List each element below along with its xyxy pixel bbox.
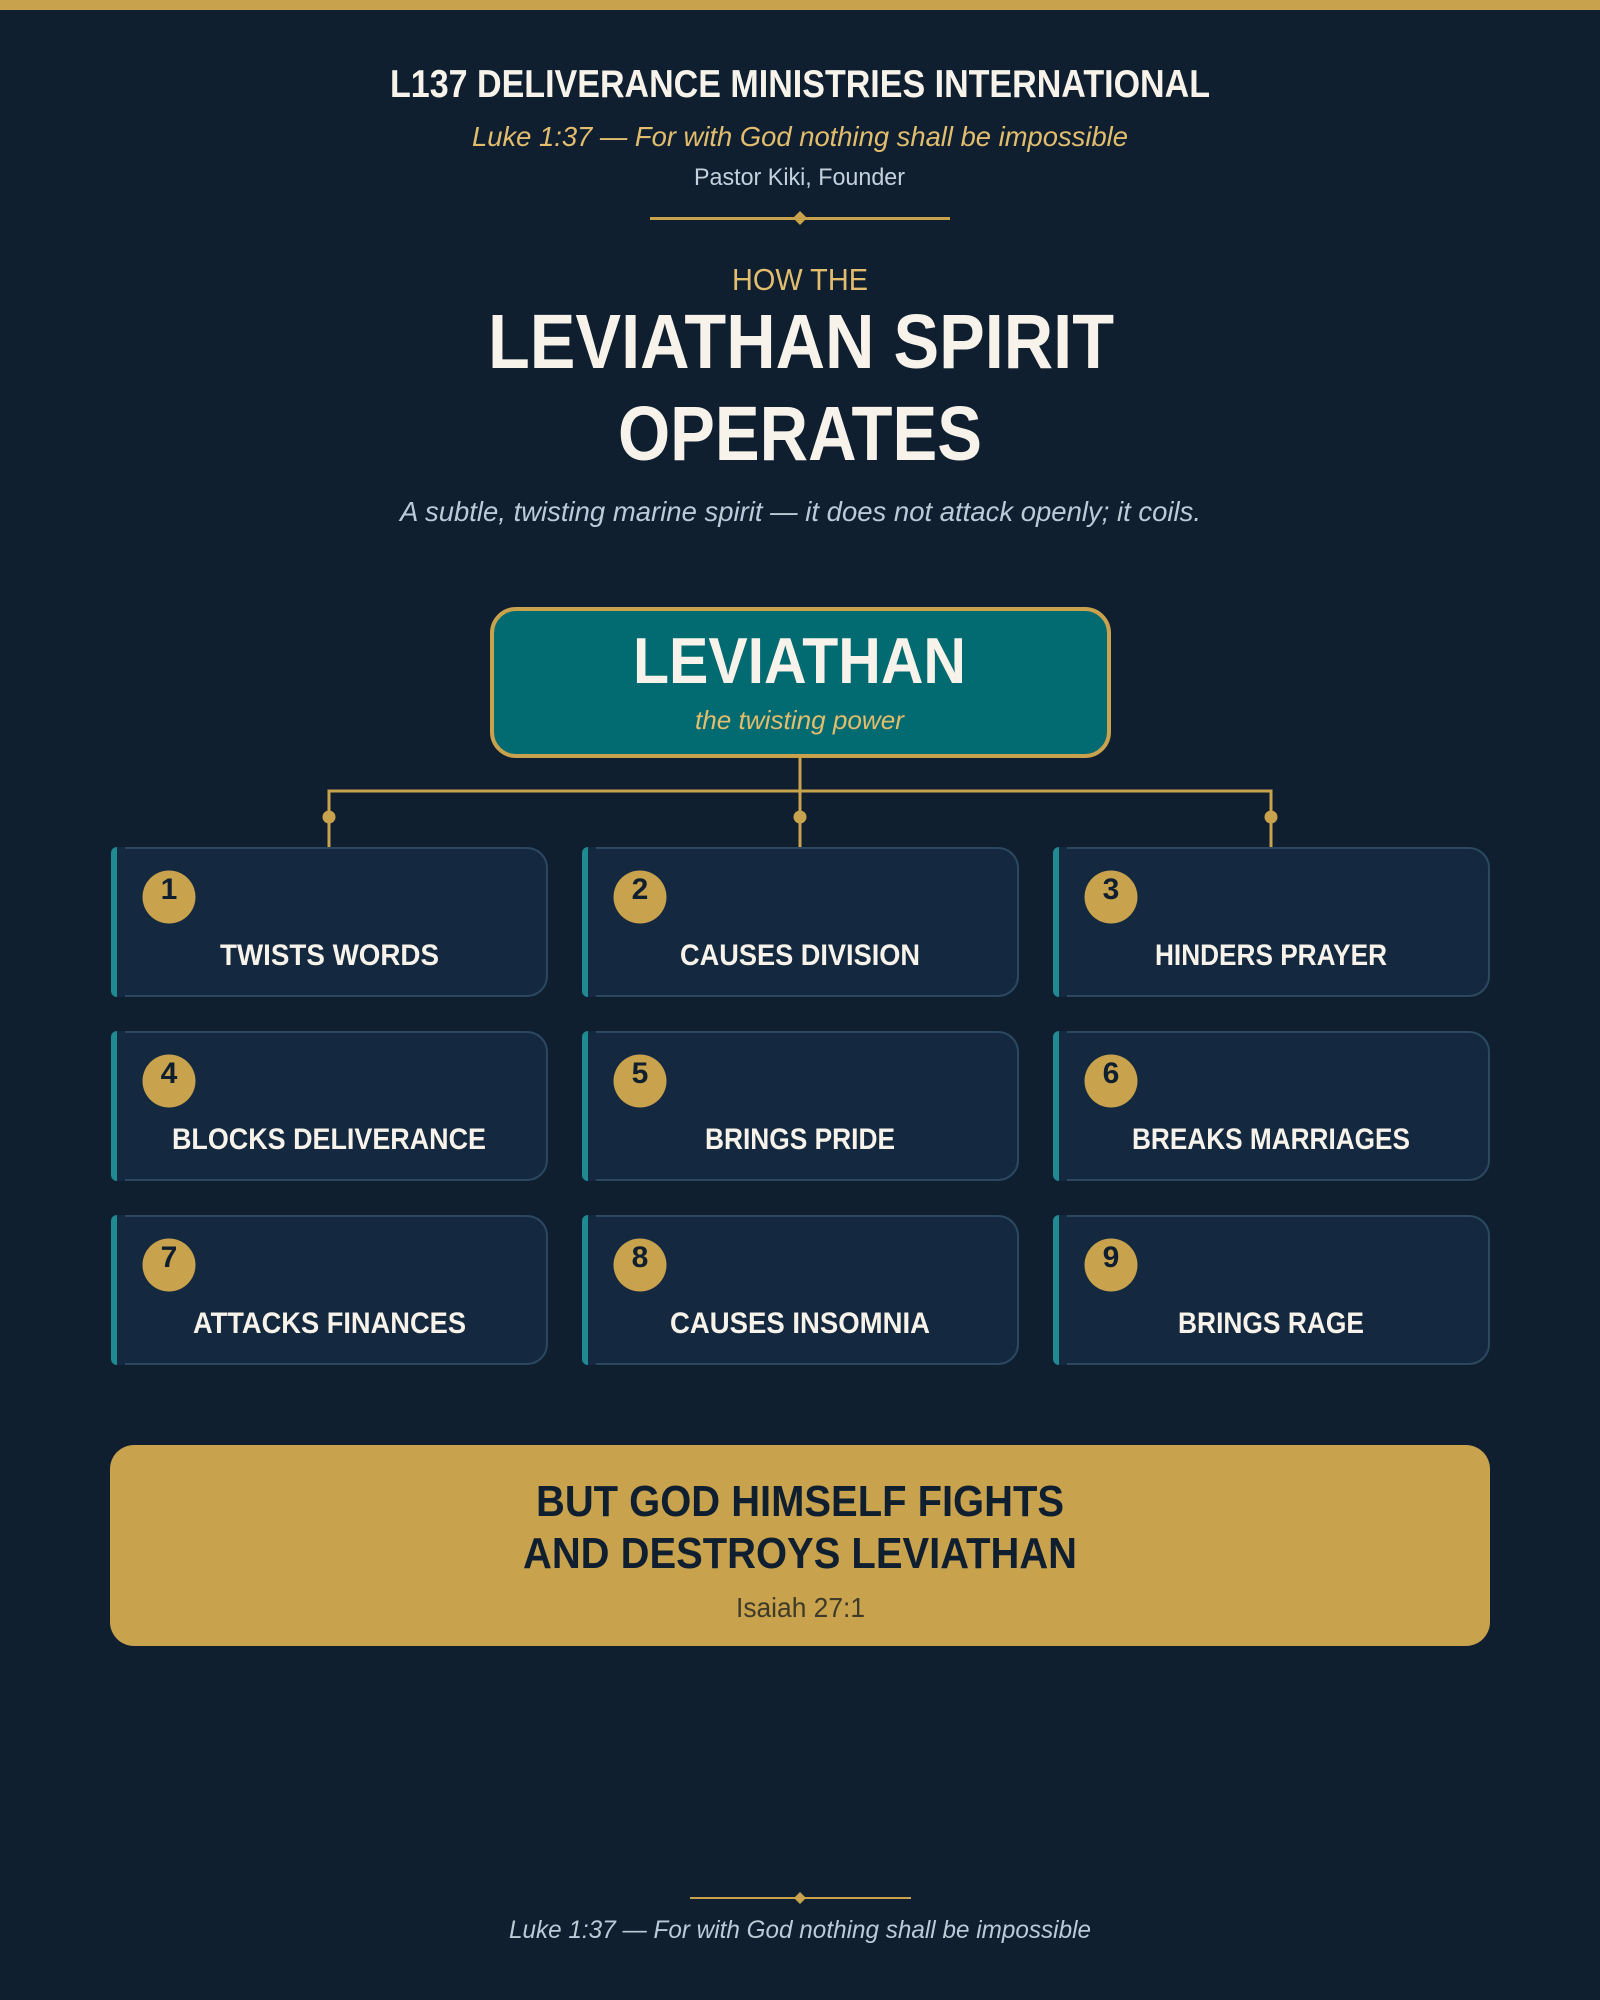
card 9: BRINGS RAGE	[1178, 1307, 1364, 1340]
card 1: TWISTS WORDS	[220, 939, 439, 972]
header divider with diamond	[650, 211, 950, 225]
callout heading line 2: AND DESTROYS LEVIATHAN	[523, 1529, 1077, 1578]
card 1: 1	[161, 873, 177, 906]
callout reference: Isaiah 27:1	[736, 1592, 865, 1623]
header: ministry block	[390, 63, 1210, 191]
card 9: 9	[1103, 1241, 1119, 1274]
title block	[398, 262, 1201, 527]
card 4: BLOCKS DELIVERANCE	[172, 1123, 486, 1156]
connector tree	[322, 757, 1278, 847]
card 7: ATTACKS FINANCES	[193, 1307, 466, 1340]
founder line: Pastor Kiki, Founder	[694, 164, 905, 191]
card 5: BRINGS PRIDE	[705, 1123, 895, 1156]
card 9	[1053, 1215, 1490, 1365]
card 5	[582, 1031, 1019, 1181]
card 4	[111, 1031, 548, 1181]
card 4: 4	[161, 1057, 178, 1090]
card 8: 8	[632, 1241, 648, 1274]
card 8	[582, 1215, 1019, 1365]
card 6: BREAKS MARRIAGES	[1132, 1123, 1410, 1156]
card 1	[111, 847, 548, 997]
card 2: CAUSES DIVISION	[680, 939, 920, 972]
main title line 2: OPERATES	[618, 391, 982, 477]
node subtitle: the twisting power	[695, 705, 905, 735]
ministry name: L137 DELIVERANCE MINISTRIES INTERNATIONAL	[390, 63, 1210, 106]
card 2	[582, 847, 1019, 997]
card 3: 3	[1103, 873, 1119, 906]
gold callout banner	[110, 1445, 1490, 1646]
card 5: 5	[632, 1057, 648, 1090]
card 3: HINDERS PRAYER	[1155, 939, 1387, 972]
card 7	[111, 1215, 548, 1365]
card 3	[1053, 847, 1490, 997]
subtitle: A subtle, twisting marine spirit — it does not attack openly; it coils.	[398, 496, 1201, 527]
footer divider with diamond	[690, 1892, 911, 1904]
card 6: 6	[1103, 1057, 1119, 1090]
eyebrow: HOW THE	[732, 262, 868, 297]
scripture line: Luke 1:37 — For with God nothing shall be impossible	[472, 121, 1128, 152]
callout heading line 1: BUT GOD HIMSELF FIGHTS	[536, 1477, 1064, 1526]
card 2: 2	[632, 873, 648, 906]
card 8: CAUSES INSOMNIA	[670, 1307, 930, 1340]
top gold bar	[0, 0, 1600, 10]
card 6	[1053, 1031, 1490, 1181]
central node: Leviathan	[492, 609, 1109, 756]
footer scripture: Luke 1:37 — For with God nothing shall be impossible	[509, 1916, 1091, 1944]
card 7: 7	[161, 1241, 177, 1274]
node title: LEVIATHAN	[633, 624, 966, 697]
main title line 1: LEVIATHAN SPIRIT	[488, 299, 1114, 385]
